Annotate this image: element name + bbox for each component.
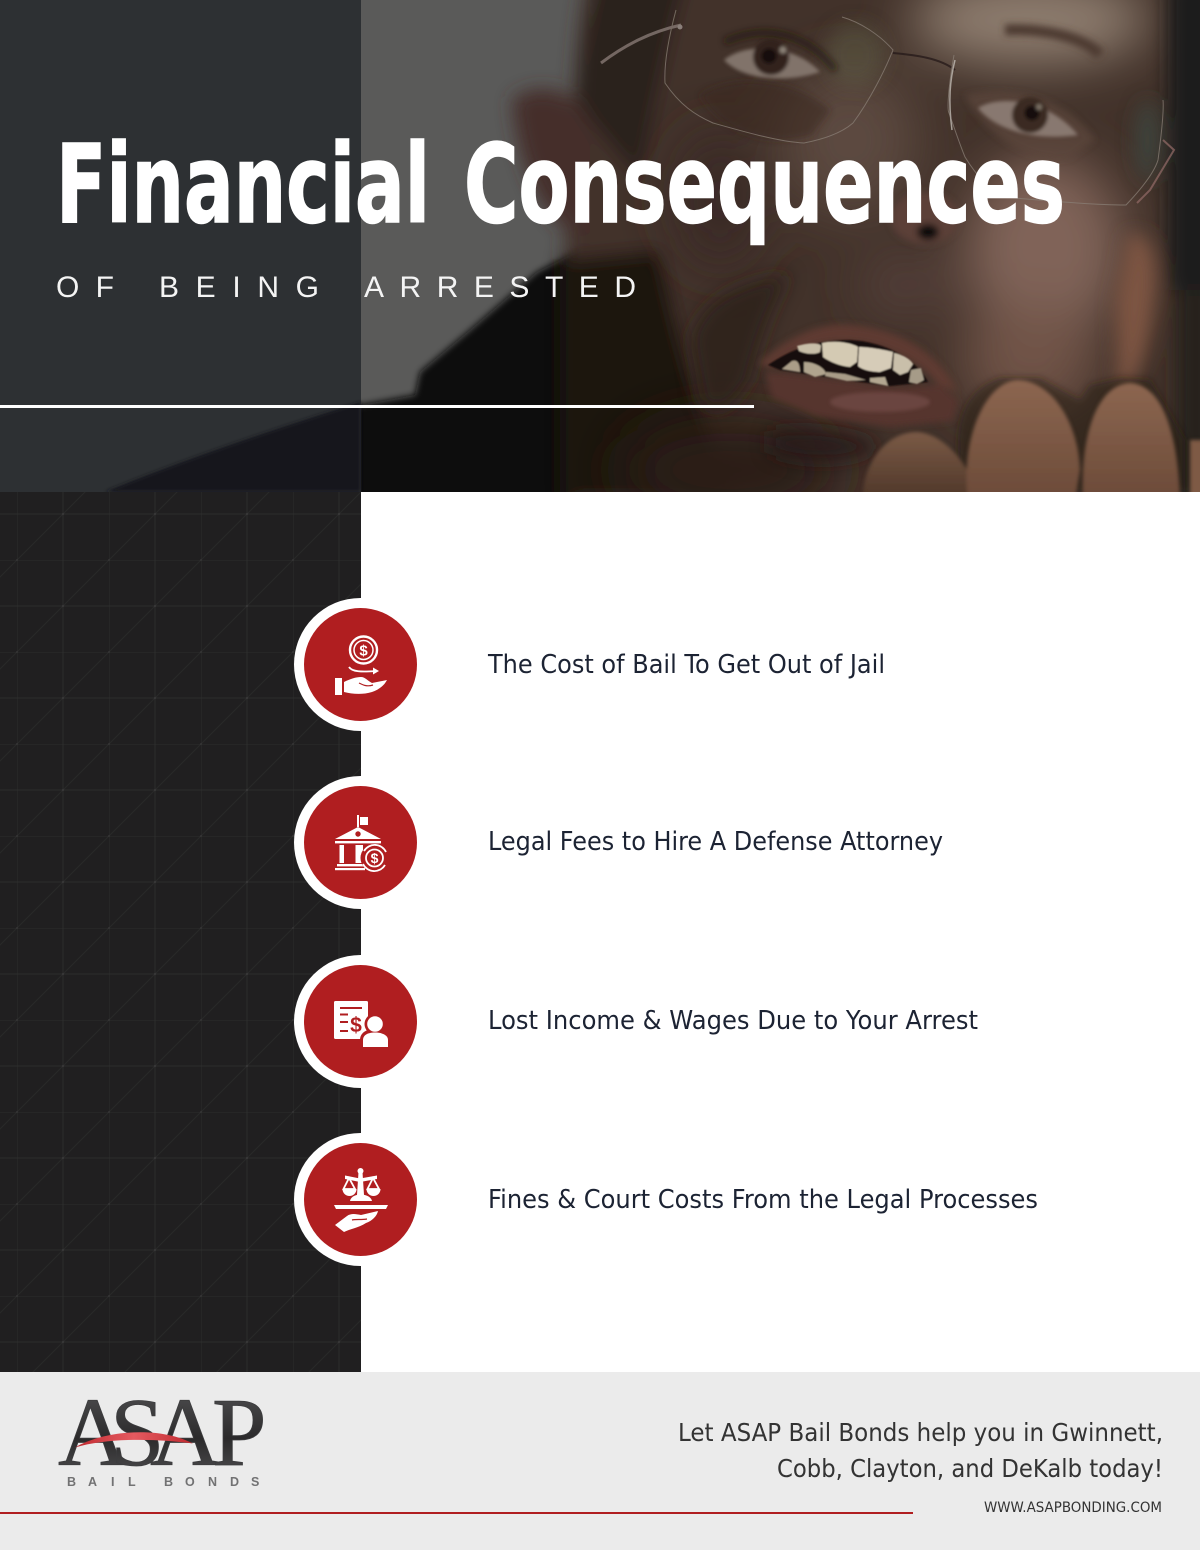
subtitle: BEING	[159, 271, 319, 304]
fingers	[863, 430, 968, 492]
logo swoosh	[75, 1432, 193, 1448]
hair	[578, 0, 690, 180]
header rule	[0, 405, 754, 408]
shoulder and dark clothing	[361, 254, 574, 492]
lower lip	[765, 372, 958, 427]
item 3: lost income	[294, 955, 978, 1088]
subtitle	[56, 271, 636, 304]
lens tints	[825, 23, 885, 87]
text: legal fees: Legal Fees to Hire A Defense Attorney	[488, 827, 943, 857]
icon: coin over hand: $	[359, 642, 368, 660]
icon: courthouse with coin: $	[371, 850, 379, 866]
face base	[564, 0, 1200, 520]
stubble	[690, 275, 790, 410]
footer call to action: Cobb, Clayton, and DeKalb today!	[777, 1454, 1163, 1483]
title: Financial	[56, 121, 430, 248]
upper lip	[758, 325, 958, 392]
item 2: legal fees	[294, 776, 943, 909]
lower teeth	[782, 361, 800, 372]
website url: WWW.ASAPBONDING.COM	[984, 1500, 1162, 1516]
dark lower jaw	[551, 247, 706, 492]
upper teeth	[797, 343, 821, 354]
logo: ASAP Bail Bonds: ASAP	[58, 1379, 267, 1487]
footer call to action: Let ASAP Bail Bonds help you in Gwinnett,	[678, 1418, 1163, 1447]
icon: scales over hand	[294, 1133, 427, 1266]
item 4: fines and court costs	[294, 1133, 1038, 1266]
icon: payslip and person: $	[350, 1014, 362, 1037]
shadow around hand	[958, 378, 1185, 492]
footer call to action	[678, 1418, 1163, 1483]
text: fines: Fines & Court Costs From the Legal Processes	[488, 1185, 1038, 1215]
mouth interior	[768, 340, 928, 386]
header photo: worried man with glasses	[0, 0, 1200, 525]
header dark left overlay	[0, 0, 361, 492]
glasses	[601, 10, 1174, 205]
logo tagline: BAILBONDS	[67, 1475, 259, 1489]
item 1: cost of bail	[294, 598, 885, 731]
footer red rule	[0, 1512, 913, 1514]
subtitle: OF	[56, 271, 114, 304]
panel: dark grid side	[0, 492, 361, 1372]
right ear	[1115, 234, 1156, 395]
icon: coin over hand	[294, 598, 427, 731]
lower lip highlight	[830, 392, 930, 412]
icon: payslip and person	[294, 955, 427, 1088]
panel: white content	[361, 492, 1200, 1372]
panel: footer	[0, 1372, 1200, 1550]
ear left	[512, 89, 590, 235]
icon: courthouse with coin	[294, 776, 427, 909]
left eye	[724, 48, 820, 78]
title	[56, 121, 1065, 248]
right eye	[978, 101, 1078, 137]
text: lost income: Lost Income & Wages Due to Your Arrest	[488, 1006, 978, 1036]
text: cost of bail: The Cost of Bail To Get Out of Jail	[487, 650, 885, 680]
subtitle: ARRESTED	[364, 271, 636, 304]
